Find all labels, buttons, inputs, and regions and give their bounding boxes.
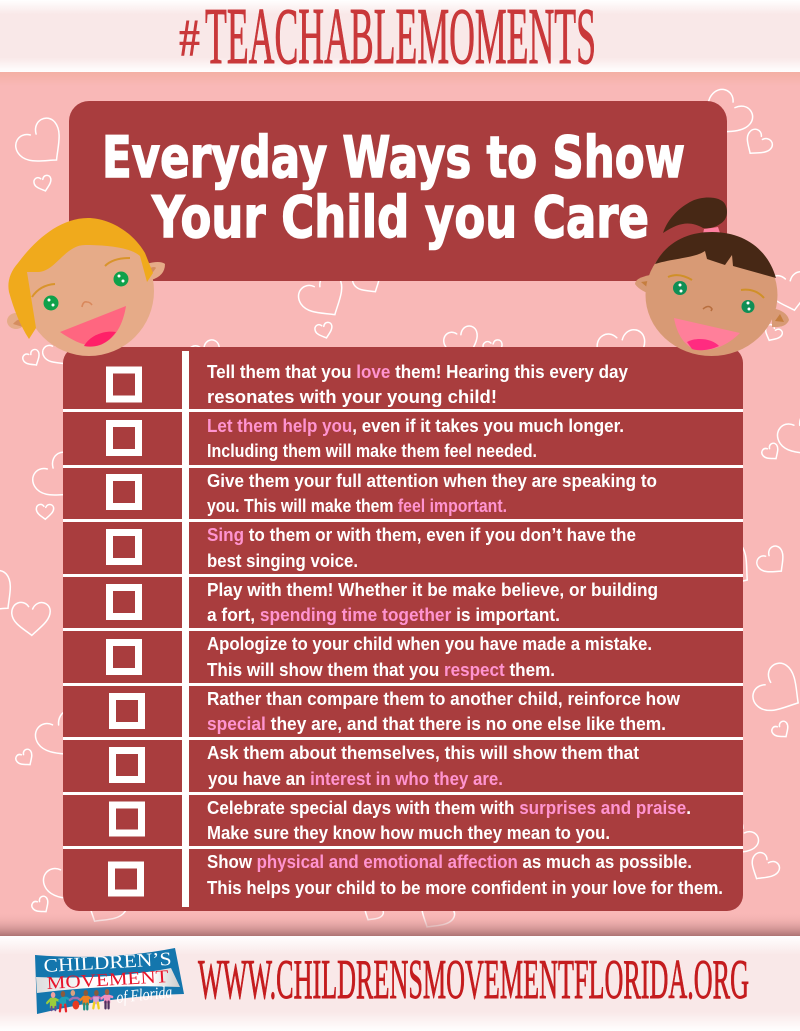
- item 5: a fort, spending time together is important.: [207, 605, 560, 625]
- row separators: [63, 351, 743, 907]
- children figures: [47, 989, 112, 1011]
- item 1: resonates with your young child!: [207, 387, 497, 407]
- item 10: This helps your child to be more confident in your love for them.: [207, 878, 723, 898]
- girl mouth: [674, 318, 740, 350]
- item 10: [207, 852, 723, 898]
- item 7: special they are, and that there is no one else like them.: [207, 714, 666, 734]
- hashtag symbol: #: [179, 8, 200, 68]
- item 3: [207, 471, 657, 516]
- item 1: [207, 362, 628, 407]
- girl hair: [655, 232, 776, 278]
- item 7: Rather than compare them to another child, reinforce how: [207, 689, 681, 709]
- item 5: Play with them! Whether it be make believe, or building: [207, 580, 658, 600]
- item 4: Sing to them or with them, even if you don’t have the: [207, 525, 636, 545]
- logo: Children's Movement of Florida: CHILDREN’S: [43, 949, 172, 977]
- item 6: This will show them that you respect them.: [207, 660, 555, 680]
- boy character: [7, 218, 165, 356]
- item 8: you have an interest in who they are.: [208, 769, 503, 789]
- item 5: [207, 580, 658, 625]
- item 9: Make sure they know how much they mean to you.: [207, 823, 610, 843]
- girl ponytail: [663, 198, 727, 233]
- checklist table: [63, 347, 743, 911]
- item 3: Give them your full attention when they are speaking to: [207, 471, 657, 491]
- item 6: Apologize to your child when you have made a mistake.: [207, 634, 652, 654]
- item 10: Show physical and emotional affection as much as possible.: [207, 852, 692, 872]
- item 8: [207, 743, 639, 789]
- logo: Children's Movement of Florida: of Florida: [115, 982, 173, 1007]
- item 3: you. This will make them feel important.: [207, 496, 507, 516]
- title line 2: Your Child you Care: [151, 185, 649, 251]
- footer band: [0, 936, 800, 1031]
- header shadow: [0, 72, 800, 86]
- item 9: [207, 798, 691, 843]
- logo: Children's Movement of Florida: [35, 948, 184, 1014]
- logo: Children's Movement of Florida: MOVEMENT: [46, 966, 169, 993]
- item 1: Tell them that you love them! Hearing this every day: [207, 362, 628, 382]
- item 7: [207, 689, 681, 734]
- item 9: Celebrate special days with them with surprises and praise.: [207, 798, 691, 818]
- footer shadow: [0, 912, 800, 936]
- checkboxes: [110, 370, 142, 893]
- item 8: Ask them about themselves, this will show them that: [207, 743, 639, 763]
- boy mouth: [60, 306, 126, 346]
- header band: [0, 0, 800, 81]
- item 4: [207, 525, 636, 571]
- girl character: [635, 198, 789, 356]
- title panel: [69, 101, 727, 281]
- item 6: [207, 634, 652, 680]
- item 2: Let them help you, even if it takes you much longer.: [207, 416, 624, 436]
- item 2: [207, 416, 624, 461]
- item 4: best singing voice.: [207, 551, 358, 571]
- boy hair: [8, 218, 153, 339]
- item 2: Including them will make them feel needed.: [207, 441, 537, 461]
